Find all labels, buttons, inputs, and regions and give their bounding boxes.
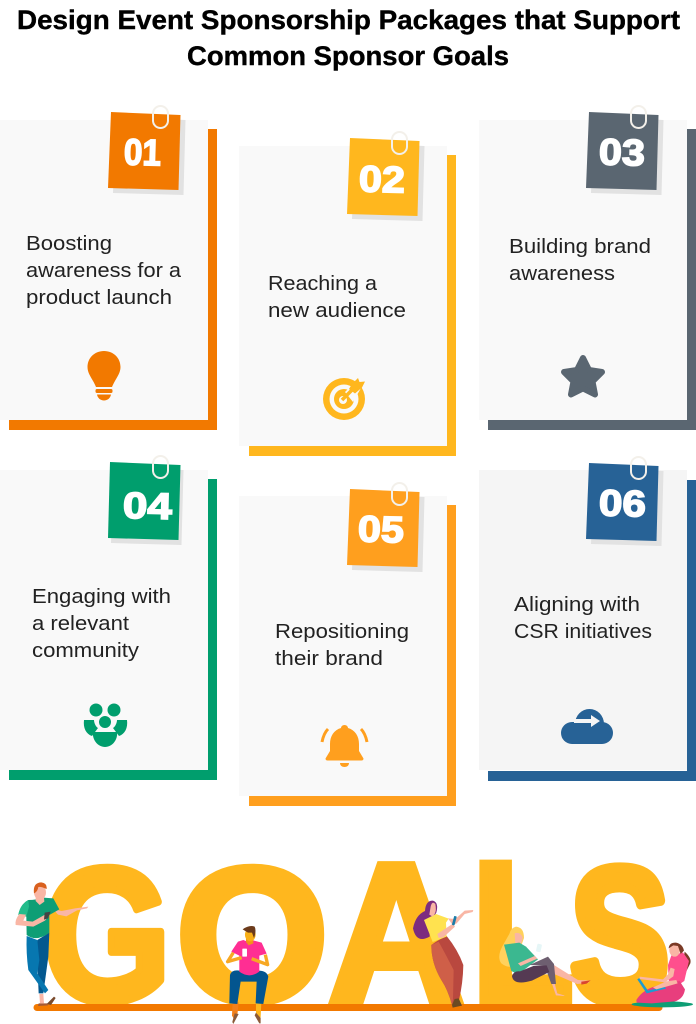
- icon: light bulb: [88, 351, 120, 400]
- panel: 03 building brand awareness: [479, 106, 696, 430]
- text: boosting awareness: awareness for a: [26, 260, 182, 282]
- text: repositioning their brand: Repositioning: [275, 621, 409, 643]
- panel: 01 boosting awareness: [0, 106, 217, 430]
- number note 04: [108, 456, 184, 545]
- text: aligning with CSR initiatives: CSR initiatives: [514, 621, 652, 643]
- text: reaching a new audience: [268, 273, 406, 322]
- number note 01: [108, 106, 186, 195]
- title: Common Sponsor Goals: [187, 41, 509, 71]
- number note 06: 06: [598, 482, 647, 525]
- icon: bell: [322, 725, 367, 767]
- number note 03: [586, 106, 664, 195]
- GOALS lettering: [42, 822, 670, 1024]
- text: engaging with a relevant community: [32, 586, 171, 662]
- icon: community group: [84, 704, 127, 747]
- text: aligning with CSR initiatives: Aligning with: [514, 594, 640, 616]
- icon: cloud with arrow: [561, 709, 613, 744]
- number note 05: [347, 483, 424, 572]
- text: repositioning their brand: [275, 621, 409, 670]
- figure: woman standing with phone: [413, 901, 473, 1008]
- figure: woman with laptop on mat: [632, 943, 693, 1007]
- icon: target with arrow: [323, 378, 365, 420]
- icon: star: [564, 358, 602, 394]
- text: boosting awareness: [26, 233, 182, 309]
- text: engaging with a relevant community: Engaging with: [32, 586, 171, 608]
- figure: man sitting with phone: [228, 926, 268, 1024]
- text: building brand awareness: awareness: [509, 263, 615, 285]
- text: engaging with a relevant community: community: [32, 640, 139, 662]
- text: engaging with a relevant community: a relevant: [32, 613, 129, 635]
- number note 02: [347, 132, 424, 221]
- figure: woman sitting reclined: [499, 927, 591, 996]
- panel: 05 repositioning their brand: [239, 483, 456, 806]
- text: reaching a new audience: new audience: [268, 300, 406, 322]
- text: boosting awareness: Boosting: [26, 233, 112, 255]
- panel: 04 engaging with a community: [0, 456, 217, 780]
- base bar: [34, 1004, 662, 1011]
- panel: 02 reaching a new audience: [239, 132, 456, 456]
- number note 06: [586, 457, 664, 546]
- title: Design Event Sponsorship Packages that Support: [17, 5, 680, 35]
- text: boosting awareness: product launch: [26, 287, 172, 309]
- title: [17, 5, 680, 71]
- text: building brand awareness: Building brand: [509, 236, 651, 258]
- text: aligning with CSR initiatives: [514, 594, 652, 643]
- panel: 06 aligning with CSR initiatives: [479, 457, 696, 781]
- text: repositioning their brand: their brand: [275, 648, 383, 670]
- text: reaching a new audience: Reaching a: [268, 273, 378, 295]
- number note 03: 03: [598, 131, 646, 174]
- figure: man standing with tablet: [15, 882, 88, 1006]
- number note 05: 05: [357, 508, 405, 551]
- number note 02: 02: [358, 158, 405, 201]
- number note 01: 01: [123, 132, 162, 173]
- number note 04: 04: [122, 485, 173, 527]
- text: building brand awareness: [509, 236, 651, 285]
